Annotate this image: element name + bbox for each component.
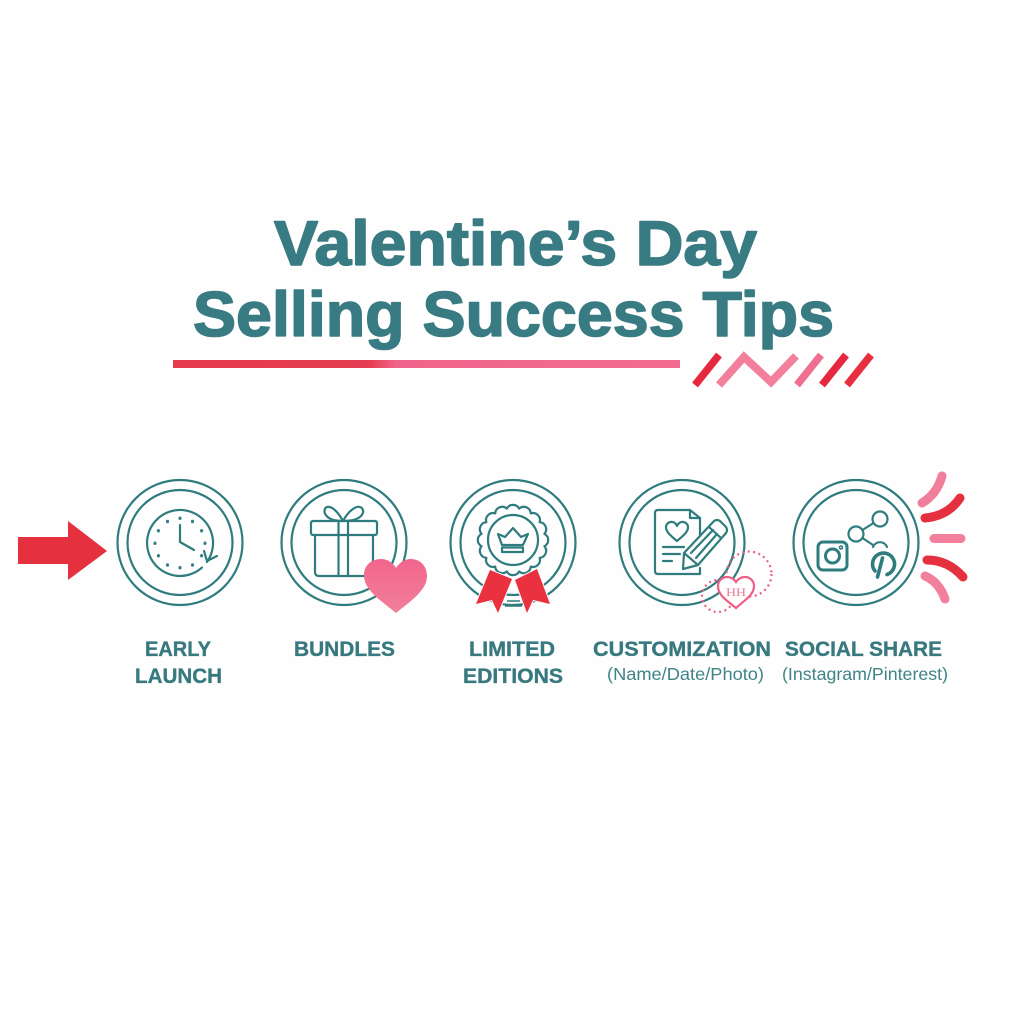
label: limited editions — [463, 638, 563, 688]
icon: monogram heart with dotted rings — [702, 552, 772, 612]
label: early launch: EARLY — [145, 638, 211, 661]
label: limited editions: EDITIONS — [463, 665, 563, 688]
arrow pointing to first tip — [18, 521, 107, 580]
label: customization — [593, 638, 771, 684]
tip 3: limited editions — [450, 480, 576, 688]
label: early launch — [135, 638, 222, 688]
tip 4: customization — [593, 480, 772, 684]
title: Selling Success Tips — [193, 280, 834, 350]
label: social share — [782, 638, 948, 684]
icon: pink heart — [364, 559, 427, 613]
title: Valentine’s Day — [274, 209, 757, 279]
title — [193, 209, 834, 350]
tip 1: early launch — [118, 480, 242, 688]
icon: rosette badge in double ring — [450, 480, 576, 613]
label: social share: (Instagram/Pinterest) — [782, 664, 948, 684]
icon: gift box in double ring — [282, 480, 406, 605]
icon: clock in double ring — [118, 480, 242, 605]
icon: monogram heart with dotted rings: HH — [726, 585, 746, 599]
label: bundles: BUNDLES — [294, 638, 395, 661]
icon: share nodes, instagram and pinterest in double ring — [794, 480, 918, 605]
label: customization: (Name/Date/Photo) — [607, 664, 764, 684]
icon: red and pink burst lines — [922, 476, 963, 599]
tip 2: bundles — [282, 480, 427, 661]
tip 5: social share — [782, 476, 963, 684]
ribbons — [505, 595, 522, 606]
label: social share: SOCIAL SHARE — [785, 638, 942, 661]
zigzag accent — [695, 355, 871, 385]
title underline — [173, 360, 680, 368]
label: early launch: LAUNCH — [135, 665, 222, 688]
icon: document and pencil in double ring — [620, 480, 744, 605]
rosette — [478, 505, 548, 575]
label: customization: CUSTOMIZATION — [593, 638, 771, 661]
label: limited editions: LIMITED — [469, 638, 555, 661]
